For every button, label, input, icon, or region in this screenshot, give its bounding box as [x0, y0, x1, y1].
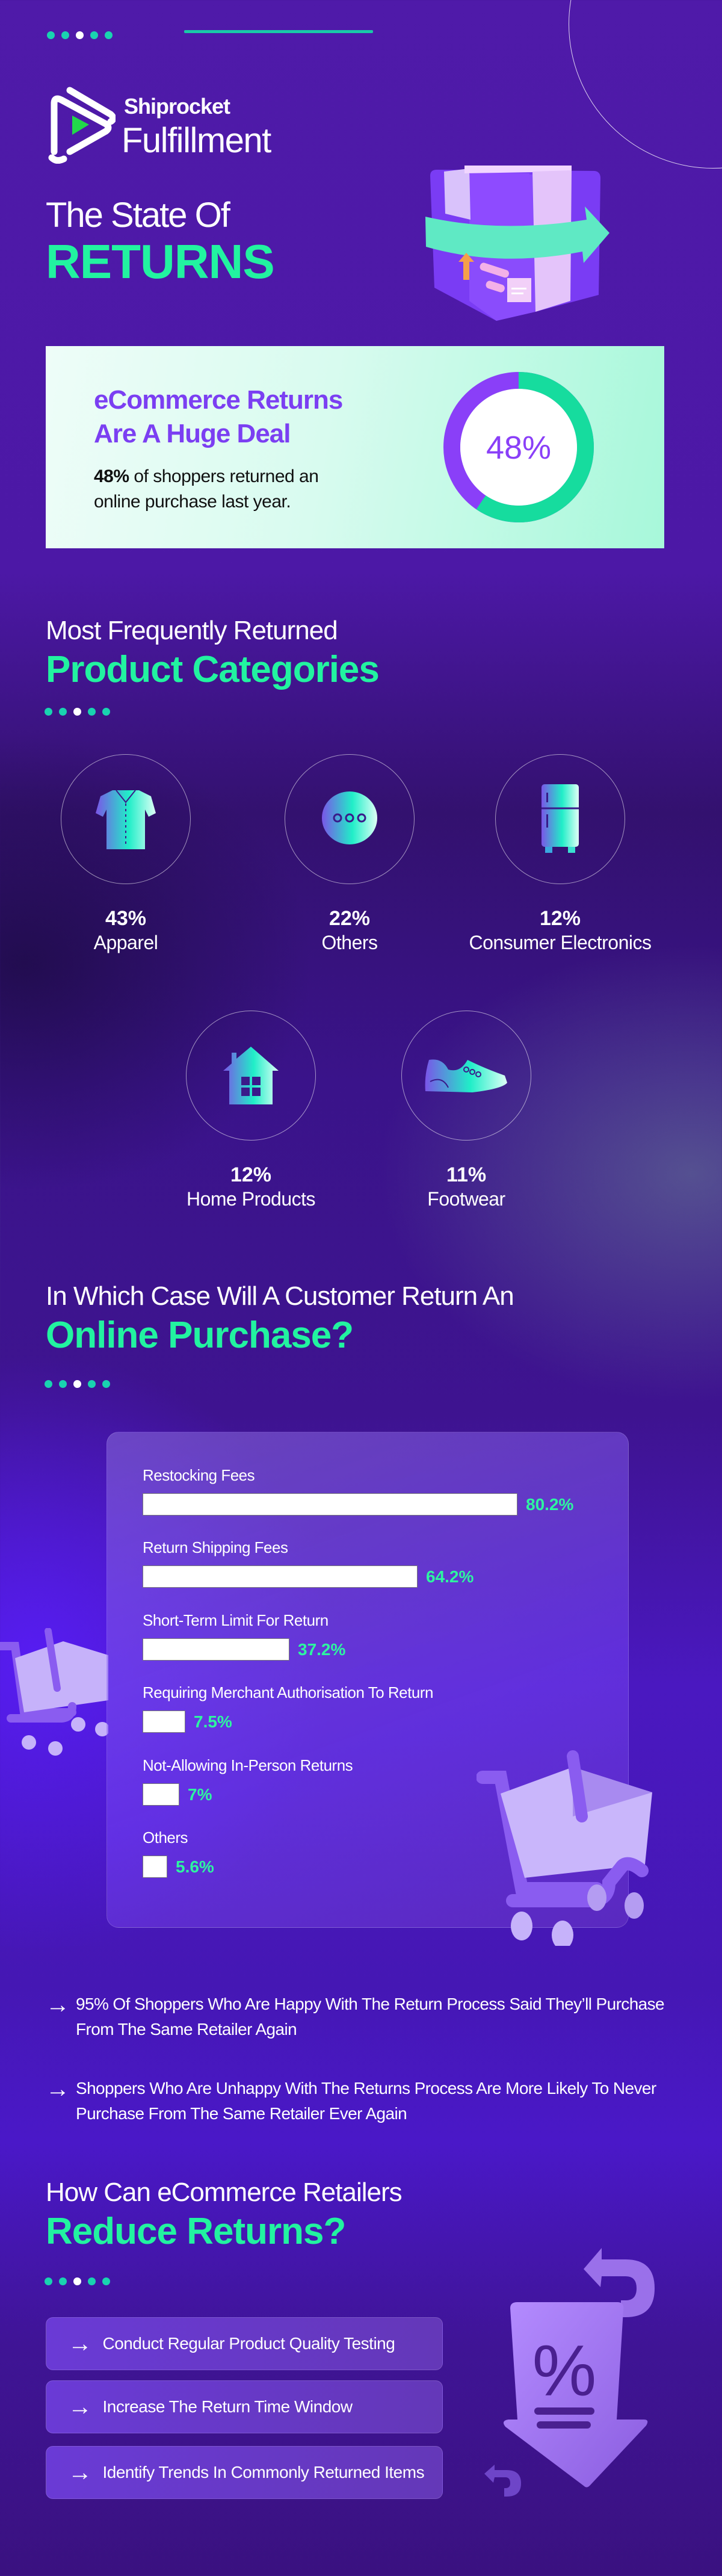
- tip: identify trends: →: [68, 2459, 91, 2486]
- card body text: [94, 466, 318, 512]
- heading: product categories: [46, 616, 379, 690]
- logo: [48, 87, 271, 164]
- card heading: eCommerce Returns: [94, 385, 342, 415]
- donut chart: 48%: [486, 430, 551, 466]
- panel: bar chart: [106, 1432, 629, 1928]
- icon: fridge: [542, 784, 579, 853]
- label: others: [321, 907, 378, 953]
- heading: online purchase: [46, 1281, 514, 1356]
- dots: [45, 708, 110, 716]
- title: RETURNS: [46, 235, 274, 288]
- tip: quality testing: →: [68, 2330, 91, 2357]
- tip: return window: →: [68, 2394, 91, 2420]
- heading: reduce returns: How Can eCommerce Retailers: [46, 2178, 402, 2207]
- category: footwear: [401, 1011, 531, 1141]
- tip: return window: Increase The Return Time Window: [102, 2397, 353, 2416]
- category: consumer electronics: [495, 754, 625, 884]
- bullet: happy shoppers: [46, 1992, 664, 2042]
- bar: in-person returns: 7%: [188, 1785, 212, 1803]
- bar: restocking fees: Restocking Fees: [143, 1466, 255, 1484]
- decorative dots top: [47, 31, 113, 39]
- bullet: happy shoppers: 95% Of Shoppers Who Are Happy With The Return Process Said They’ll Purchase: [76, 1995, 664, 2013]
- logo text: Shiprocket: [124, 94, 230, 119]
- card body text: 48% of shoppers returned an: [94, 466, 318, 486]
- bar: return shipping fees: [143, 1538, 474, 1588]
- tip: quality testing: Conduct Regular Product Quality Testing: [102, 2334, 395, 2353]
- bar: restocking fees: [143, 1466, 573, 1516]
- bar: merchant authorisation: Requiring Merchant Authorisation To Return: [143, 1683, 433, 1701]
- icon: shirt: [96, 790, 156, 849]
- bullet: unhappy shoppers: Shoppers Who Are Unhappy With The Returns Process Are More Likely To Never: [76, 2079, 656, 2098]
- logo: Fulfillment: [122, 121, 271, 160]
- category: apparel: [61, 754, 191, 884]
- tip: return window: [46, 2380, 443, 2433]
- label: consumer electronics: Consumer Electronics: [469, 932, 651, 953]
- label: others: 22%: [329, 907, 370, 930]
- card heading: [94, 385, 342, 448]
- illustration: down arrow with percent: %: [532, 2330, 596, 2411]
- label: consumer electronics: [469, 907, 651, 953]
- bar: short-term limit: 37.2%: [298, 1639, 345, 1659]
- tip: identify trends: [46, 2446, 443, 2499]
- label: home products: 12%: [230, 1163, 271, 1186]
- bar: others: Others: [143, 1828, 188, 1847]
- icon: house: [223, 1047, 279, 1104]
- bar: others: 5.6%: [176, 1857, 214, 1875]
- bullet: unhappy shoppers: →: [46, 2076, 69, 2102]
- title: The State Of: [46, 196, 229, 235]
- category: others: [285, 754, 415, 884]
- heading: product categories: Product Categories: [46, 649, 379, 690]
- icon: more dots: [322, 791, 377, 844]
- label: footwear: [427, 1163, 505, 1210]
- stat card: 48% returned: [46, 346, 664, 548]
- heading: online purchase: In Which Case Will A Customer Return An: [46, 1281, 514, 1311]
- bar: in-person returns: [143, 1756, 353, 1806]
- card body text: online purchase last year.: [94, 492, 291, 512]
- dots: [45, 2277, 110, 2285]
- bullet: happy shoppers: From The Same Retailer Again: [76, 2020, 297, 2039]
- bar: merchant authorisation: [143, 1683, 433, 1733]
- decorative circle arc: [569, 0, 722, 169]
- label: apparel: 43%: [105, 907, 146, 930]
- icon: shoe: [425, 1059, 507, 1092]
- tip: identify trends: Identify Trends In Commonly Returned Items: [102, 2463, 424, 2482]
- icon: logo mark: [48, 87, 116, 164]
- illustration: cart left: [0, 1628, 108, 1756]
- bullet: unhappy shoppers: Purchase From The Same Retailer Ever Again: [76, 2104, 407, 2123]
- label: apparel: [94, 907, 158, 953]
- heading: online purchase: Online Purchase?: [46, 1314, 353, 1356]
- donut chart: [443, 372, 594, 522]
- decorative line top: [184, 30, 373, 33]
- illustration: down arrow with percent: [481, 2245, 674, 2498]
- label: apparel: Apparel: [94, 932, 158, 953]
- heading: reduce returns: [46, 2176, 402, 2254]
- bar: others: [143, 1828, 214, 1878]
- label: consumer electronics: 12%: [540, 907, 581, 930]
- heading: reduce returns: Reduce Returns?: [46, 2211, 345, 2252]
- label: home products: Home Products: [187, 1188, 315, 1210]
- bar: restocking fees: 80.2%: [526, 1495, 573, 1513]
- tip: quality testing: [46, 2317, 443, 2370]
- label: footwear: 11%: [446, 1163, 486, 1186]
- bar: merchant authorisation: 7.5%: [194, 1712, 232, 1731]
- dots: [45, 1380, 110, 1388]
- bar: short-term limit: Short-Term Limit For Return: [143, 1611, 329, 1629]
- title: [46, 196, 274, 288]
- bar: return shipping fees: Return Shipping Fees: [143, 1538, 288, 1556]
- illustration: box with arrow: [425, 166, 609, 321]
- bar: return shipping fees: 64.2%: [426, 1567, 474, 1585]
- heading: product categories: Most Frequently Returned: [46, 616, 338, 645]
- illustration: cart right: [477, 1750, 659, 1946]
- category: home products: [186, 1011, 316, 1141]
- bullet: unhappy shoppers: [46, 2076, 656, 2126]
- bar: short-term limit: [143, 1611, 345, 1661]
- label: home products: [187, 1163, 315, 1210]
- bullet: happy shoppers: →: [46, 1992, 69, 2018]
- card heading: Are A Huge Deal: [94, 419, 290, 448]
- label: others: Others: [321, 932, 378, 953]
- bar: in-person returns: Not-Allowing In-Person Returns: [143, 1756, 353, 1774]
- label: footwear: Footwear: [427, 1188, 505, 1210]
